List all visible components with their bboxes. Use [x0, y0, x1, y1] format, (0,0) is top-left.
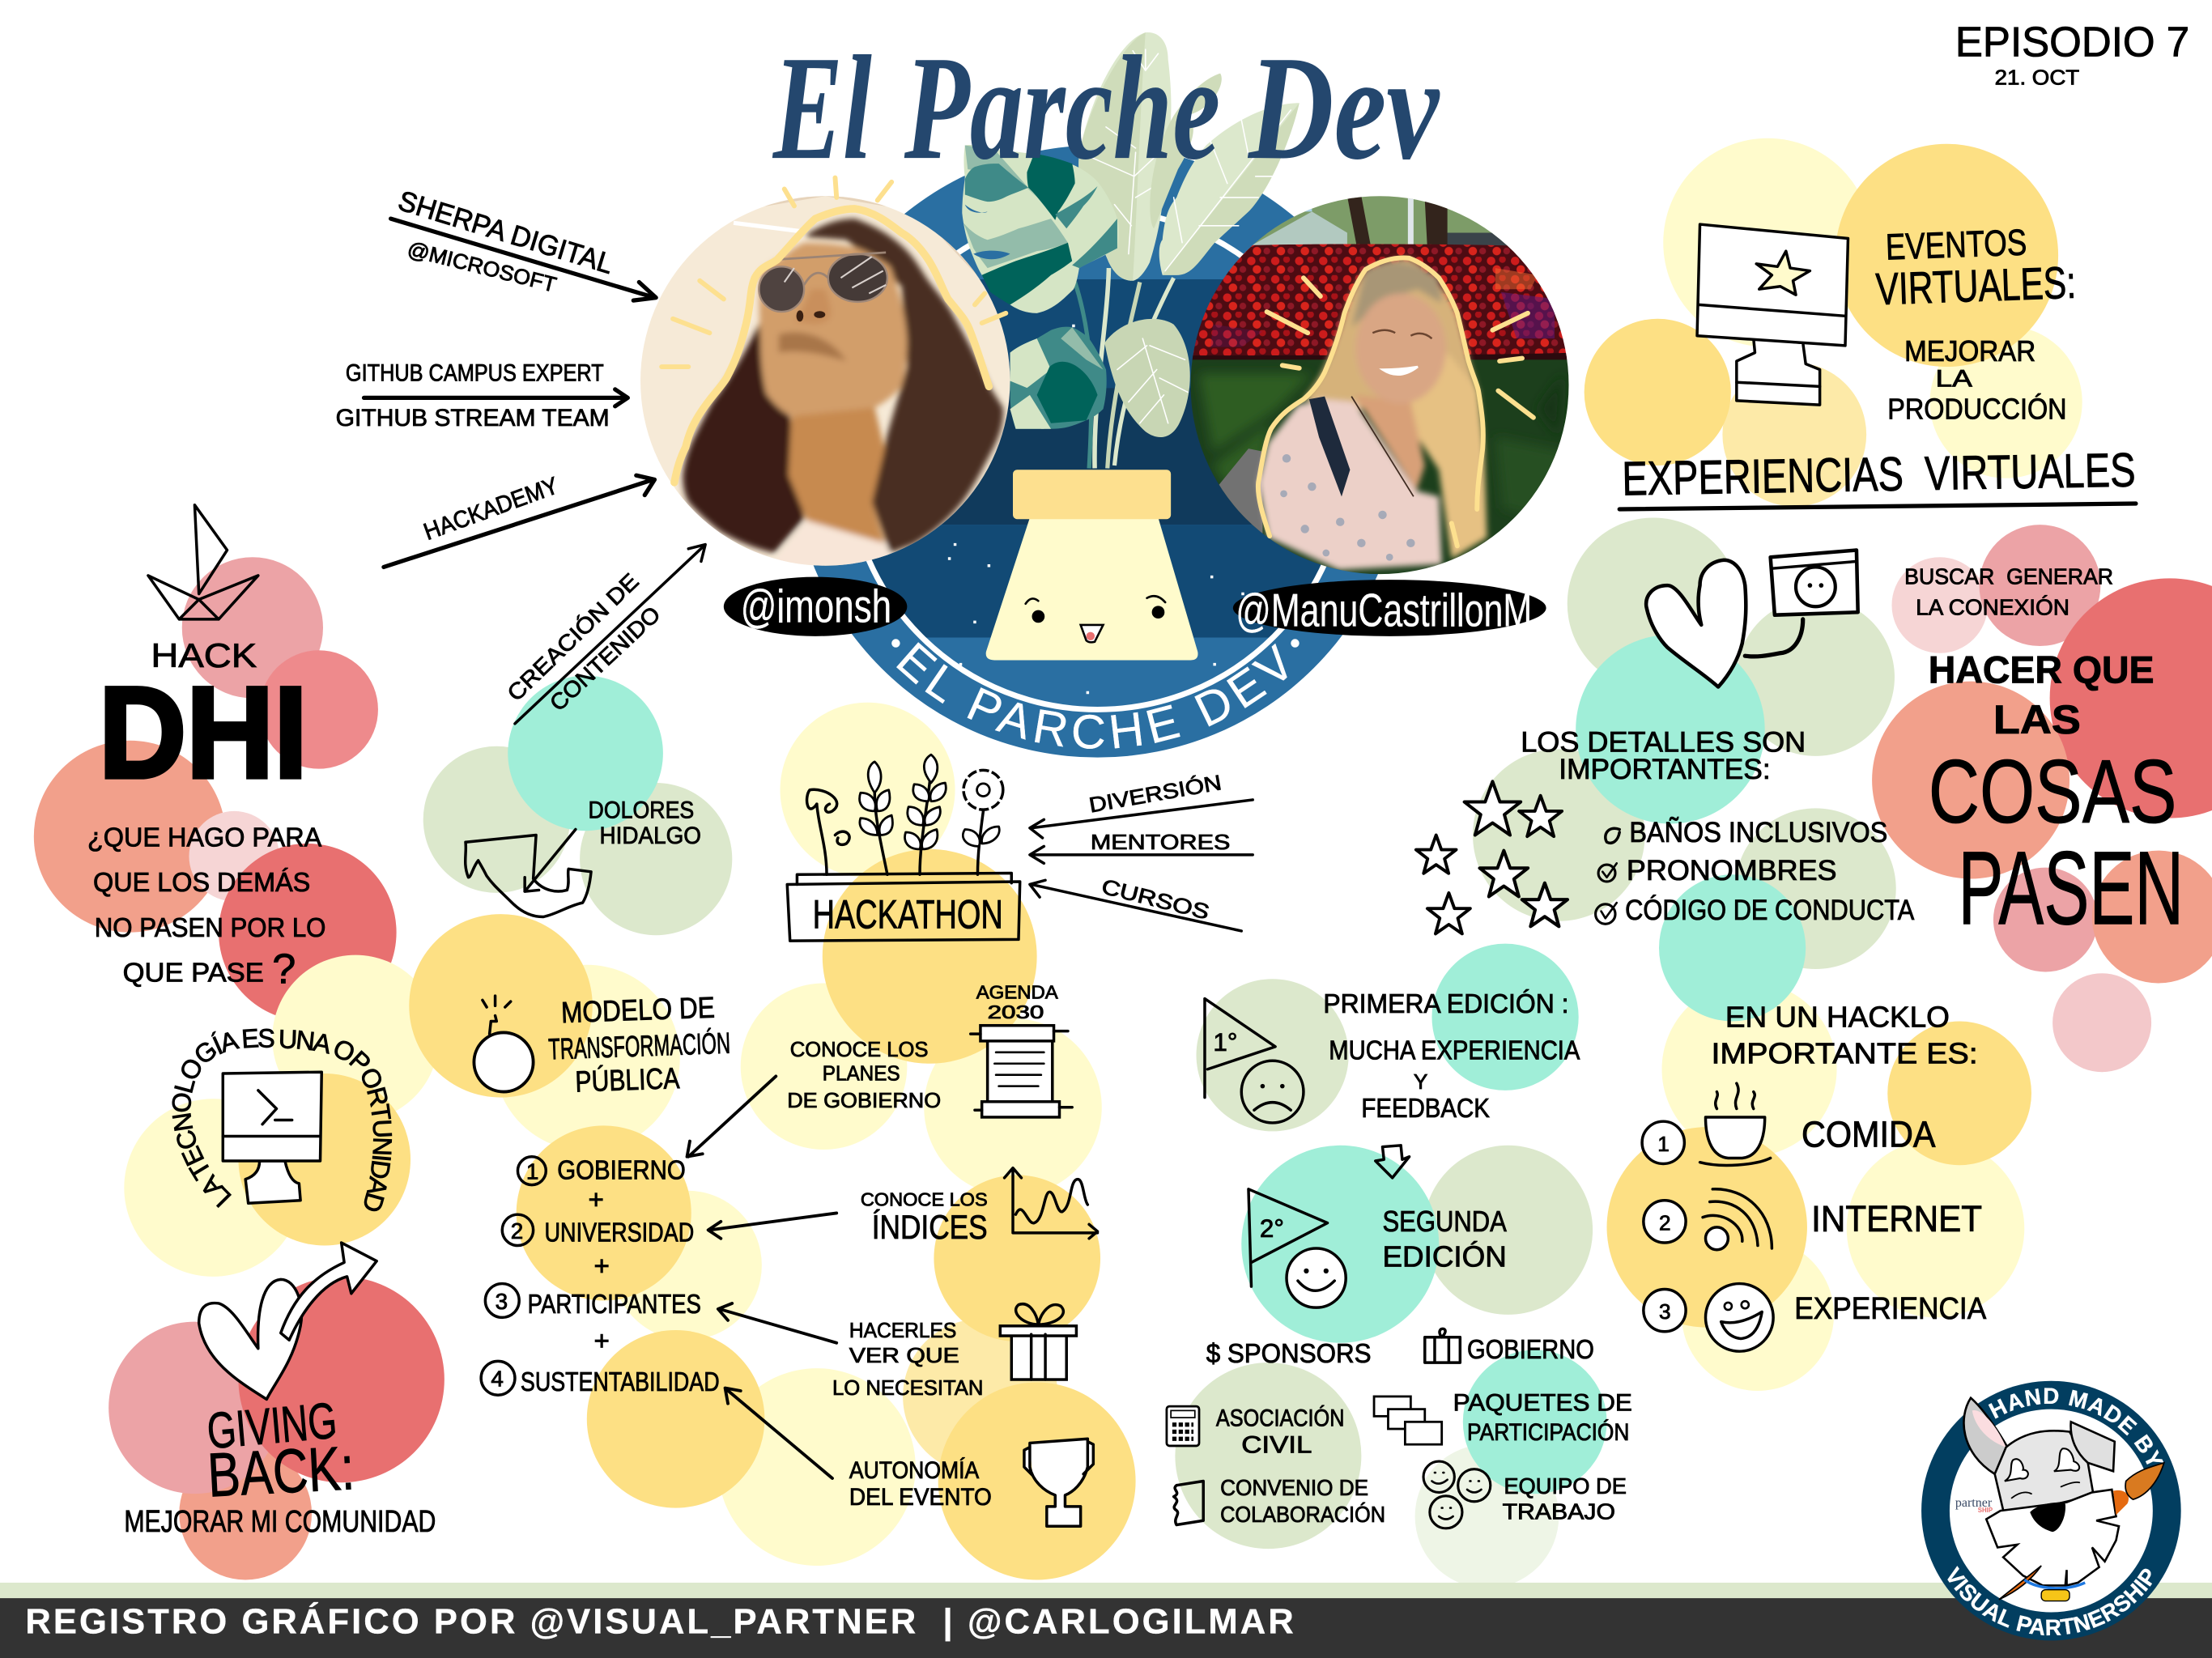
dog ear right	[2071, 1422, 2115, 1471]
text: modelo de transformación pública: TRANSFORMACIÓN	[548, 1027, 731, 1066]
list: gobierno universidad participantes sustentabilidad: GOBIERNO	[557, 1156, 686, 1186]
text: buscar generar la conexión: BUSCAR GENERAR	[1904, 563, 2113, 589]
icon: flowers	[807, 755, 1003, 874]
text: Hackademy: HACKADEMY	[420, 472, 562, 546]
title: Parche	[904, 24, 1220, 190]
gobierno with icon	[1425, 1329, 1594, 1365]
text: hacerles ver: VER QUE	[849, 1343, 959, 1367]
dog ear left	[1963, 1398, 2007, 1474]
text: giving back: BACK:	[206, 1434, 356, 1511]
text: Sherpa Digital: @MICROSOFT	[405, 236, 559, 297]
text: eventos virtuales: PRODUCCIÓN	[1887, 392, 2067, 425]
heading: Hack DHI: DHI	[99, 660, 308, 805]
icon: down arrow	[1376, 1146, 1410, 1178]
text: pregunta DHI: NO PASEN POR LO	[95, 913, 325, 943]
text: convenio de colaboración: CONVENIO DE	[1220, 1475, 1368, 1500]
list: gobierno universidad participantes sustentabilidad: SUSTENTABILIDAD	[521, 1367, 720, 1397]
title: Dev	[1247, 24, 1440, 190]
icon: origami boat	[148, 505, 258, 619]
text: los detalles son importantes: LOS DETALLES SON	[1521, 727, 1806, 759]
text: primera edición	[1323, 988, 1580, 1124]
item: experiencia: 3	[1659, 1299, 1671, 1324]
hackathon labels	[1087, 770, 1230, 925]
icon: terminal monitor	[223, 1072, 321, 1203]
text: equipo de trabajo: EQUIPO DE	[1504, 1473, 1627, 1499]
photo: imonsh	[635, 184, 1015, 572]
list: gobierno universidad participantes sustentabilidad: UNIVERSIDAD	[545, 1218, 694, 1248]
text: autonomía del evento	[849, 1457, 992, 1511]
text: Dolores Hidalgo	[589, 797, 701, 849]
text: creación de contenido: CONTENIDO	[545, 602, 665, 716]
text: en un hacklo importante: EN UN HACKLO	[1725, 1000, 1950, 1033]
photo outline and rays: imonsh	[661, 178, 1006, 483]
text: hacer que las cosas pasen: HACER QUE	[1929, 648, 2155, 691]
text: paquetes de participación: PAQUETES DE	[1453, 1389, 1632, 1416]
text: pregunta DHI: QUE PASE	[123, 959, 264, 988]
icon: monitor with star	[1697, 224, 1848, 405]
hackathon labels: CURSOS	[1100, 874, 1212, 925]
handle: imonsh	[724, 577, 907, 636]
text: hacerles ver	[832, 1318, 983, 1400]
photo: Manu Castrillon	[1185, 190, 1580, 578]
text: modelo de transformación pública: PÚBLICA	[575, 1061, 681, 1099]
item: experiencia	[1644, 1284, 1987, 1351]
box: hackathon	[787, 874, 1020, 941]
text: GitHub titles: GITHUB STREAM TEAM	[336, 405, 610, 432]
list: gobierno universidad participantes sustentabilidad: +	[594, 1326, 610, 1356]
text: asociación civil: CIVIL	[1241, 1432, 1312, 1459]
text: convenio de colaboración: COLABORACIÓN	[1220, 1502, 1385, 1527]
hackathon labels: DIVERSIÓN	[1087, 770, 1223, 818]
checklist: BAÑOS INCLUSIVOS	[1629, 817, 1887, 848]
hackathon labels: MENTORES	[1091, 830, 1230, 854]
icon: Mexico map	[466, 830, 591, 917]
text: primera edición: Y	[1414, 1069, 1427, 1094]
text: creación de contenido: CREACIÓN DE	[502, 568, 644, 706]
text: sponsors: $ SPONSORS	[1206, 1339, 1372, 1369]
text: Sherpa Digital: SHERPA DIGITAL	[394, 185, 617, 280]
text: en un hacklo importante: IMPORTANTE ES:	[1711, 1037, 1978, 1070]
arrow to imonsh	[391, 219, 656, 300]
icon: second edition flag and happy face: 2°	[1260, 1214, 1284, 1243]
handle: ManuCastrillonM: @ManuCastrillonM	[1236, 585, 1532, 637]
pot character	[986, 470, 1198, 660]
plant	[962, 32, 1300, 468]
episode label: EPISODIO 7	[1955, 19, 2189, 66]
text: pregunta DHI: ¿QUE HAGO PARA	[87, 823, 322, 852]
text: giving back: MEJORAR MI COMUNIDAD	[124, 1504, 436, 1539]
icon: gift	[1000, 1304, 1076, 1380]
icon: first edition flag and sad face: 1°	[1213, 1028, 1237, 1056]
text: Dolores Hidalgo: HIDALGO	[599, 823, 701, 849]
text: buscar generar la conexión: LA CONEXIÓN	[1916, 595, 2069, 620]
central badge: El Parche Dev logo	[813, 147, 1378, 758]
photo outline and rays: Manu Castrillon	[1258, 257, 1534, 546]
text: eventos virtuales: EVENTOS	[1885, 222, 2027, 268]
episode label: 21. OCT	[1995, 66, 2079, 90]
text: segunda edición: EDICIÓN	[1383, 1240, 1507, 1273]
icon: team faces	[1423, 1461, 1491, 1528]
text: eventos virtuales: MEJORAR	[1904, 334, 2035, 368]
text: los detalles son importantes: IMPORTANTES:	[1559, 754, 1771, 785]
icon: heart and camera	[1646, 551, 1858, 687]
footer bar	[0, 1583, 2212, 1658]
text: segunda edición: SEGUNDA	[1383, 1205, 1507, 1238]
arrow creación	[515, 545, 705, 724]
list: gobierno universidad participantes sustentabilidad: 3	[496, 1289, 508, 1314]
footer bar: REGISTRO GRÁFICO POR @VISUAL_PARTNER | @CARLOGILMAR	[25, 1601, 1294, 1643]
text: GitHub titles: GITHUB CAMPUS EXPERT	[346, 359, 604, 386]
text: conoce los índices	[861, 1189, 988, 1246]
episode label	[1955, 19, 2189, 90]
list: gobierno universidad participantes sustentabilidad: 2	[511, 1218, 523, 1244]
list: gobierno universidad participantes sustentabilidad: 1	[526, 1159, 538, 1184]
text: conoce los planes: DE GOBIERNO	[787, 1088, 941, 1112]
badge: hand made by visual partnership: HAND MADE BY	[1989, 1388, 2163, 1465]
text: pregunta DHI: QUE LOS DEMÁS	[93, 868, 310, 898]
checklist: PRONOMBRES	[1627, 855, 1837, 886]
text: conoce los planes	[787, 1037, 941, 1112]
icon: stars	[1416, 781, 1568, 933]
icon: second edition flag and happy face	[1249, 1189, 1346, 1307]
text: modelo de transformación pública: MODELO DE	[560, 991, 716, 1029]
text: paquetes de participación: PARTICIPACIÓN	[1467, 1419, 1629, 1446]
text: convenio de colaboración	[1220, 1475, 1385, 1527]
icon: document	[1174, 1481, 1203, 1524]
text: asociación civil	[1216, 1405, 1344, 1459]
checklist: CÓDIGO DE CONDUCTA	[1625, 895, 1915, 926]
text: hacer que las cosas pasen: LAS	[1993, 696, 2081, 742]
icon: heart with arrow	[199, 1243, 376, 1399]
text: giving back	[124, 1392, 436, 1539]
text: hacerles ver: LO NECESITAN	[832, 1375, 983, 1400]
title	[772, 24, 1440, 190]
collar tag	[2041, 1590, 2069, 1601]
dog eyebrows and lashes	[2005, 1448, 2079, 1498]
text: primera edición: PRIMERA EDICIÓN :	[1323, 988, 1568, 1019]
badge: hand made by visual partnership	[1921, 1381, 2181, 1640]
dog beard	[1986, 1490, 2119, 1585]
icon: first edition flag and sad face	[1205, 999, 1304, 1123]
item: internet: 2	[1659, 1210, 1671, 1235]
list: gobierno universidad participantes sustentabilidad: 4	[491, 1367, 504, 1392]
hackathon arrows	[1030, 800, 1253, 931]
central badge: El Parche Dev logo: EL PARCHE DEV	[896, 642, 1287, 749]
text: creación de contenido	[502, 568, 665, 716]
text: autonomía del evento: AUTONOMÍA	[849, 1457, 979, 1484]
icon: papers	[1374, 1397, 1442, 1444]
icon: bomb	[474, 996, 534, 1092]
text: en un hacklo importante	[1711, 1000, 1978, 1070]
text: primera edición: FEEDBACK	[1361, 1094, 1490, 1124]
text: hacerles ver: HACERLES	[849, 1318, 956, 1342]
text: equipo de trabajo	[1503, 1473, 1627, 1524]
item: comida: 1	[1657, 1132, 1670, 1156]
list: gobierno universidad participantes sustentabilidad: +	[589, 1185, 604, 1215]
text: paquetes de participación	[1453, 1389, 1632, 1446]
title: El	[772, 24, 872, 190]
text: buscar generar la conexión	[1904, 563, 2113, 620]
icon: agenda 2030 scroll: AGENDA	[976, 982, 1059, 1003]
partner logo: partner	[1955, 1496, 1993, 1510]
dog face	[1995, 1431, 2094, 1516]
text: conoce los planes: CONOCE LOS	[790, 1037, 928, 1061]
text: giving back: GIVING	[205, 1392, 339, 1460]
item: experiencia: EXPERIENCIA	[1794, 1291, 1987, 1326]
text: conoce los planes: PLANES	[823, 1061, 900, 1086]
icon: trophy	[1024, 1439, 1093, 1526]
text: Dolores Hidalgo: DOLORES	[589, 797, 694, 824]
icon: agenda 2030 scroll	[971, 982, 1072, 1117]
text: segunda edición	[1383, 1205, 1507, 1273]
arc text: la tecnología es una oportunidad: LA TECNOLOGÍA ES UNA OPORTUNIDAD	[172, 1028, 392, 1211]
icon: calculator	[1167, 1406, 1199, 1446]
arrow Hackademy	[384, 475, 654, 567]
arrows to list	[687, 1076, 836, 1478]
text: asociación civil: ASOCIACIÓN	[1216, 1405, 1344, 1432]
badge: hand made by visual partnership: VISUAL PARTNERSHIP	[1947, 1566, 2152, 1635]
text: conoce los índices: CONOCE LOS	[861, 1189, 988, 1210]
list: gobierno universidad participantes sustentabilidad: PARTICIPANTES	[528, 1290, 701, 1320]
item: comida: COMIDA	[1802, 1114, 1936, 1155]
list: gobierno universidad participantes sustentabilidad: +	[594, 1252, 610, 1282]
text: autonomía del evento: DEL EVENTO	[849, 1484, 992, 1511]
box: hackathon: HACKATHON	[813, 891, 1003, 937]
gobierno with icon: GOBIERNO	[1467, 1335, 1594, 1365]
icon: line chart	[1005, 1168, 1098, 1239]
partner logo: SHIP	[1978, 1507, 1993, 1514]
icon: agenda 2030 scroll: 2030	[988, 1001, 1044, 1022]
text: eventos virtuales: VIRTUALES:	[1875, 257, 2077, 314]
item: internet	[1644, 1189, 1982, 1250]
text: los detalles son importantes	[1521, 727, 1806, 785]
arrow GitHub	[364, 389, 627, 406]
text: eventos virtuales	[1875, 222, 2077, 425]
text: conoce los índices: ÍNDICES	[872, 1208, 988, 1246]
collar	[2024, 1579, 2085, 1588]
text: primera edición: MUCHA EXPERIENCIA	[1329, 1036, 1580, 1066]
text: pregunta DHI	[87, 823, 325, 993]
item: internet: INTERNET	[1811, 1198, 1982, 1239]
text: GitHub titles	[336, 359, 610, 432]
heading: Hack DHI: HACK	[151, 636, 257, 674]
text: pregunta DHI: ?	[272, 946, 296, 993]
text: modelo de transformación pública	[548, 991, 731, 1099]
handle: imonsh: @imonsh	[741, 580, 891, 632]
checklist	[1596, 817, 1915, 926]
text: eventos virtuales: LA	[1936, 365, 1972, 392]
dog nose	[2030, 1503, 2065, 1532]
item: comida	[1642, 1083, 1936, 1165]
list: gobierno universidad participantes sustentabilidad	[481, 1156, 720, 1397]
text: equipo de trabajo: TRABAJO	[1503, 1499, 1615, 1524]
brush	[1999, 1463, 2164, 1600]
text: hacer que las cosas pasen	[1929, 648, 2184, 946]
